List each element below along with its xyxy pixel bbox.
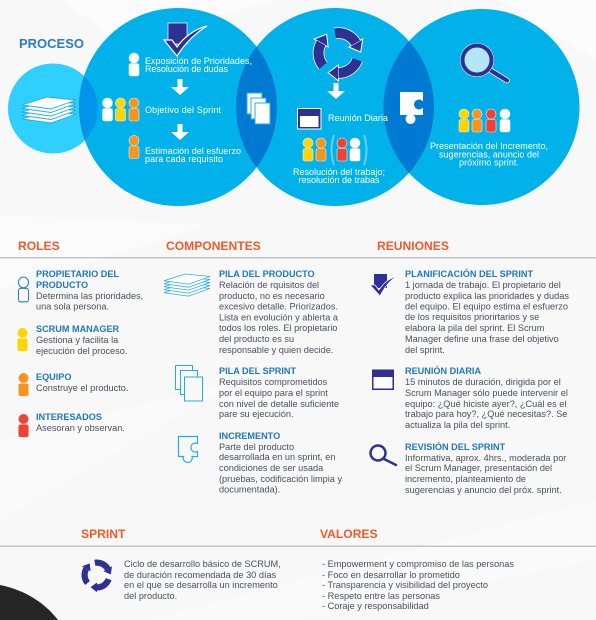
icon: daily window (298, 108, 321, 129)
heading: roles: ROLES (18, 239, 60, 253)
planning text: Objetivo del Sprint (145, 105, 221, 115)
component: pila del producto (219, 269, 339, 355)
component: pila del sprint: Requisitos comprometidos (219, 377, 328, 387)
values list: - Respeto entre las personas (322, 591, 440, 601)
icon: reunion window (372, 370, 394, 390)
values list: - Empowerment y compromiso de las personas (322, 559, 514, 569)
component: pila del sprint (219, 366, 339, 419)
meeting: reunion diaria: REUNIÓN DIARIA (405, 365, 481, 376)
sprint text: del producto. (124, 591, 177, 601)
icon: magnifier (460, 43, 507, 80)
meeting: revision: Informativa, aprox. 4hrs., moderada por (405, 453, 566, 463)
meeting: revision (405, 441, 566, 495)
icon: pila del producto (164, 274, 210, 296)
role: equipo: Construye el producto. (36, 383, 128, 393)
meeting: reunion diaria: actualiza la pila del sprint. (405, 420, 510, 430)
icon: sprint pages (247, 93, 270, 124)
review text: sugerencias, anuncio del (439, 150, 539, 160)
component: pila del sprint: por el equipo para el sprint (219, 388, 328, 398)
daily text: Reunión Diaria (328, 113, 388, 123)
values list: - Transparencia y visibilidad del proyecto (322, 580, 488, 590)
parentheses (332, 135, 366, 165)
heading: valores: VALORES (320, 527, 378, 541)
meeting: planificacion: del equipo. El equipo estima el esfuerzo (405, 302, 568, 312)
meeting: revision: sugerencias y anuncio del próx. sprint. (405, 485, 562, 495)
sprint text: Ciclo de desarrollo básico de SCRUM, (124, 559, 281, 569)
icon: puzzle increment (400, 92, 424, 124)
daily work text: resolución de trabas (298, 175, 380, 185)
role: interesados: Asesoran y observan. (36, 423, 125, 433)
meeting: revision: incremento, planteamiento de (405, 474, 526, 484)
role: interesados (18, 412, 125, 437)
role: interesados: INTERESADOS (36, 412, 102, 422)
values list: - Foco en desarrollar lo prometido (322, 570, 460, 580)
component: pila del producto: del producto es su (219, 334, 294, 344)
icon: revision magnifier (370, 446, 396, 465)
role: propietario (18, 269, 143, 312)
process circles (8, 8, 580, 206)
role: equipo (18, 372, 128, 396)
planning text: para cada requisito (145, 154, 223, 164)
icon: pila del sprint (176, 366, 202, 401)
meeting: planificacion: PLANIFICACIÓN DEL SPRINT (405, 268, 534, 279)
icon: product backlog stack (22, 97, 76, 123)
icon: planning check (164, 23, 207, 56)
role: scrum manager (18, 324, 127, 356)
component: incremento (219, 431, 342, 494)
meeting: planificacion: 1 jornada de trabajo. El propietario del (405, 280, 561, 290)
bottom rule (0, 546, 596, 547)
component: incremento: condiciones de ser usada (219, 463, 324, 473)
heading: componentes: COMPONENTES (166, 239, 261, 253)
meeting: planificacion: producto explica las prioridades y dudas (405, 291, 569, 301)
component: pila del sprint: con nivel de detalle suficiente (219, 399, 339, 409)
meeting: planificacion (405, 268, 569, 355)
icon: cycle (304, 25, 370, 91)
component: incremento: documentada). (219, 484, 280, 494)
role: equipo: EQUIPO (36, 372, 72, 382)
review people (459, 109, 510, 132)
meeting: revision: el Scrum Manager, presentación del (405, 463, 552, 473)
corner shape (0, 585, 58, 620)
meeting: planificacion: elabora la pila del sprint. El Scrum (405, 323, 545, 333)
meeting: reunion diaria: Scrum Manager sólo puede intervenir el (405, 388, 568, 398)
role: propietario: una sola persona. (36, 302, 109, 312)
meeting: reunion diaria (405, 365, 568, 430)
process heading: PROCESO (19, 36, 84, 51)
role: propietario: Determina las prioridades, (36, 291, 143, 301)
meeting: reunion diaria: equipo: ¿Qué hiciste ayer?, ¿Cuál es el (405, 399, 566, 409)
role: scrum manager: ejecución del proceso. (36, 346, 127, 356)
meeting: reunion diaria: 15 minutos de duración, dirigida por el (405, 377, 561, 387)
sprint text (124, 559, 281, 601)
values list: - Coraje y responsabilidad (322, 601, 429, 611)
arrows (171, 79, 345, 140)
planning people (102, 53, 139, 158)
meeting: reunion diaria: trabajo para hoy?, ¿Qué necesitas?. Se (405, 409, 567, 419)
meeting: planificacion: Manager define una frase del objetivo (405, 334, 559, 344)
sprint text: de duración recomendada de 30 días (124, 570, 277, 580)
planning text: Resolución de dudas (145, 64, 228, 74)
component: pila del producto: Lista en evolución y abierta a (219, 312, 339, 322)
daily work text (293, 167, 385, 185)
meeting: revision: REVISIÓN DEL SPRINT (405, 441, 506, 452)
component: pila del sprint: PILA DEL SPRINT (219, 366, 296, 376)
section rule (0, 257, 596, 258)
role: propietario: PRODUCTO (36, 280, 88, 290)
planning text (145, 56, 252, 164)
component: pila del sprint: pare su ejecución. (219, 409, 294, 419)
component: incremento: desarrollada en un sprint, en (219, 452, 335, 462)
review text: próximo sprint. (459, 158, 519, 168)
component: incremento: INCREMENTO (219, 431, 280, 441)
daily people (303, 138, 360, 161)
icon: sprint cycle (76, 557, 117, 598)
review text: Presentación del Incremento, (430, 141, 548, 151)
meeting: planificacion: de los requisitos priorirtarios y se (405, 312, 539, 322)
component: pila del producto: Relación de rquisitos del (219, 280, 319, 290)
daily work text: Resolución del trabajo; (293, 167, 385, 177)
heading: reuniones: REUNIONES (377, 239, 449, 253)
component: pila del producto: PILA DEL PRODUCTO (219, 269, 315, 279)
component: pila del producto: todos los roles. El propietario (219, 323, 337, 333)
component: pila del producto: producto, no es necesario (219, 291, 325, 301)
component: incremento: Parte del producto (219, 442, 294, 452)
icon: incremento puzzle (178, 436, 198, 462)
component: pila del producto: responsable y quien decide. (219, 345, 333, 355)
role: scrum manager: SCRUM MANAGER (36, 324, 120, 334)
role: propietario: PROPIETARIO DEL (36, 269, 119, 279)
component: pila del producto: excesivo detalle. Priorizados. (219, 302, 338, 312)
planning text: Exposición de Prioridades, (145, 56, 252, 66)
review text (430, 141, 548, 168)
values list (322, 559, 514, 611)
role: scrum manager: Gestiona y facilita la (36, 335, 119, 345)
sprint text: en el que se desarrolla un incremento (124, 580, 278, 590)
heading: sprint: SPRINT (81, 527, 126, 541)
meeting: planificacion: del sprint. (405, 345, 445, 355)
planning text: Estimación del esfuerzo (145, 146, 241, 156)
icon: planificacion check (370, 274, 397, 296)
component: incremento: (pruebas, codificación limpia y (219, 474, 342, 484)
